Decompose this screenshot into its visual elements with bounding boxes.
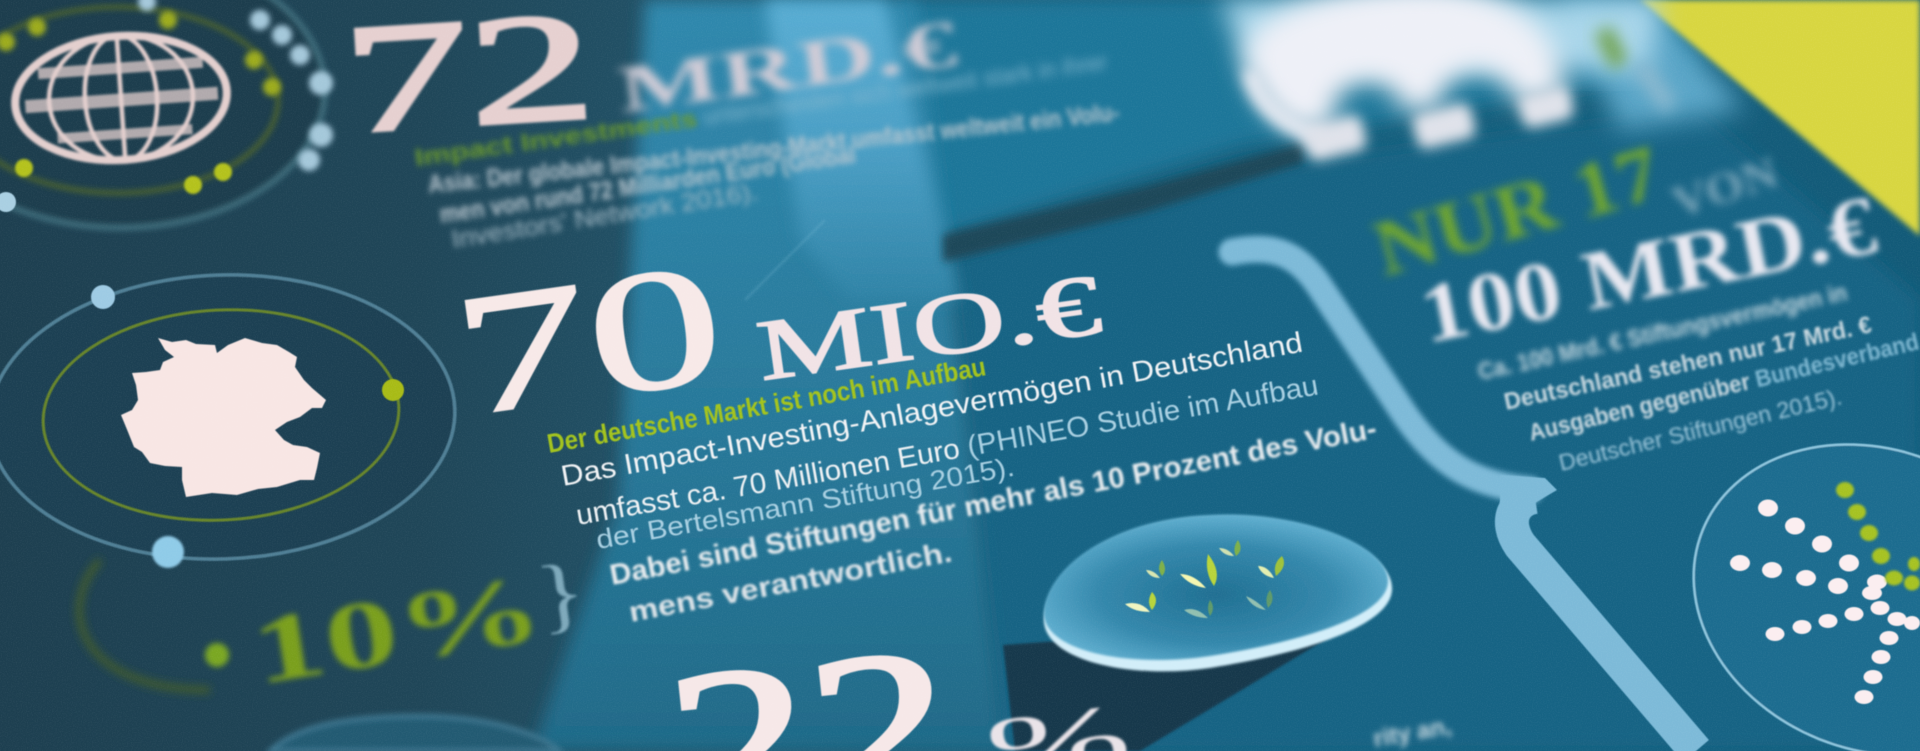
icon: dotted star in circle <box>1692 442 1920 751</box>
elephant tail marks <box>1603 30 1670 108</box>
small curly brace: } <box>531 545 591 644</box>
heading: Nur 17 von 100 Mrd. Euro: NUR 17 <box>1365 128 1669 292</box>
text block: global impact investing market <box>413 49 1121 254</box>
icon: Germany with orbits <box>0 267 460 568</box>
panel: bright column core <box>765 0 960 300</box>
heading: Nur 17 von 100 Mrd. Euro <box>1365 128 1884 362</box>
dark diagonal stripe <box>943 143 1303 262</box>
droplet shadow <box>1003 620 1358 751</box>
icon: white elephant silhouette <box>1220 0 1660 140</box>
text block: foundation assets: Deutschland stehen nur 17 Mrd. € <box>1502 311 1874 416</box>
stat: plus 10 percent: 10% <box>245 553 550 705</box>
heading: Nur 17 von 100 Mrd. Euro: 100 MRD.€ <box>1412 178 1884 362</box>
heading: Nur 17 von 100 Mrd. Euro: VON <box>1666 147 1784 228</box>
panel: right blue field <box>950 110 1920 751</box>
text block: foundation assets: Deutscher Stiftungen 2015). <box>1556 383 1844 476</box>
text block: German market: Der deutsche Markt ist noch im Aufbau <box>545 351 988 459</box>
stat: plus 10 percent <box>79 553 550 705</box>
text block: German market: mens verantwortlich. <box>626 537 955 629</box>
yellow corner <box>1640 0 1920 236</box>
heading: 70 Mio. Euro <box>444 227 1106 453</box>
heading: 72 Mrd. Euro <box>339 0 961 166</box>
panel: upper centre blue field <box>900 0 1700 240</box>
thin diagonal line <box>745 220 825 300</box>
text block: German market: Dabei sind Stiftungen für mehr als 10 Prozent des Volu- <box>607 413 1379 592</box>
heading: 70 Mio. Euro: 70 <box>444 227 734 453</box>
stat: 22 percent <box>677 654 1128 751</box>
heading: 70 Mio. Euro: MIO.€ <box>751 256 1106 399</box>
text block: German market: der Bertelsmann Stiftung 2015). <box>594 452 1017 555</box>
light haze near the yellow corner <box>1560 0 1745 130</box>
text block: global impact investing market: Asia: Der globale Impact-Investing-Markt umfasst weltweit ein Volu- <box>427 98 1121 199</box>
panel: light vertical column <box>532 0 1003 751</box>
text block: German market: Das Impact-Investing-Anlagevermögen in Deutschland <box>559 327 1305 493</box>
text block: global impact investing market: Investors' Network 2016). <box>450 178 760 254</box>
text block: German market <box>545 327 1379 629</box>
icon: water droplet with sprouts <box>1044 515 1392 671</box>
text block: global impact investing market: men von rund 72 Milliarden Euro (Global <box>438 141 857 229</box>
text block: foundation assets: Ca. 100 Mrd. € Stiftungsvermögen in <box>1476 279 1850 386</box>
large bracket <box>1232 249 1696 751</box>
icon: elephant feet <box>1302 84 1575 163</box>
text block: global impact investing market: Impact Investments <box>413 106 699 172</box>
heading: 72 Mrd. Euro: MRD.€ <box>614 7 961 127</box>
text block: German market: umfasst ca. 70 Millionen Euro (PHINEO Studie im Aufbau <box>574 370 1321 532</box>
bottom orbit arc <box>270 716 560 751</box>
icon: globe with orbit dots <box>0 0 333 228</box>
text block: foundation assets <box>1476 279 1920 476</box>
text block: global impact investing market: unterscheiden sich weltweit stark in ihrer <box>701 49 1109 131</box>
